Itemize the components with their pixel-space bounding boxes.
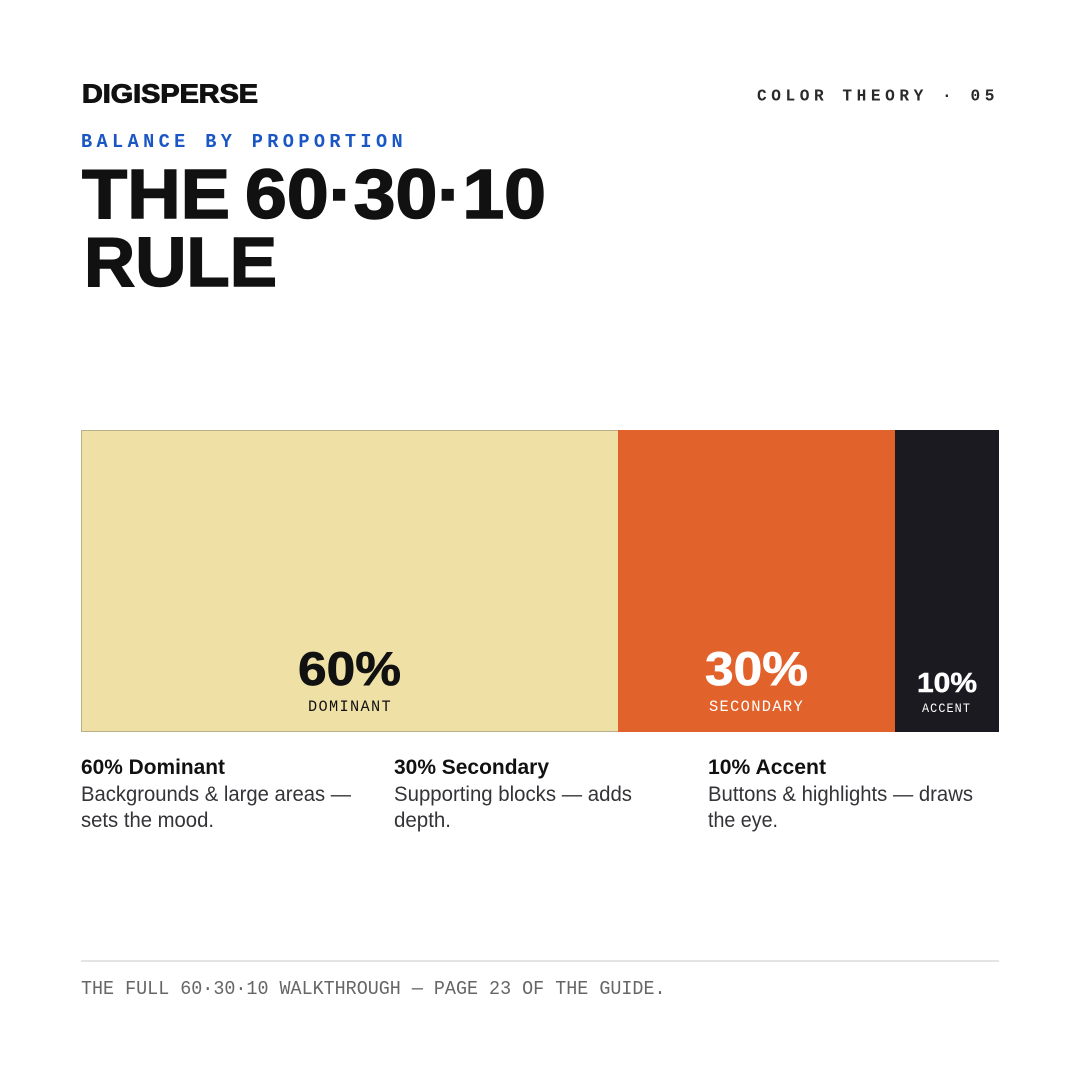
title: THE xyxy=(82,155,230,233)
segment: 30% secondary: 30% xyxy=(705,642,808,695)
series label: COLOR THEORY · 05 xyxy=(757,88,999,106)
segment: 10% accent: ACCENT xyxy=(922,701,971,716)
brand wordmark: DIGISPERSE xyxy=(82,80,258,108)
segment: 60% dominant: DOMINANT xyxy=(308,698,392,716)
title: RULE xyxy=(84,223,277,301)
footer note: THE FULL 60·30·10 WALKTHROUGH — PAGE 23 OF THE GUIDE. xyxy=(81,978,666,1000)
segment: 60% dominant: 60% xyxy=(298,642,401,695)
segment: 60% dominant xyxy=(82,430,618,732)
title: 60·30·10 xyxy=(245,155,546,233)
eyebrow: BALANCE BY PROPORTION xyxy=(81,131,407,153)
title xyxy=(82,155,546,301)
legend: 10% accent: the eye. xyxy=(708,809,778,832)
proportion bar chart xyxy=(82,430,999,732)
legend: 30% secondary xyxy=(394,756,632,832)
legend: 30% secondary: Supporting blocks — adds xyxy=(394,783,632,806)
legend: 10% accent: Buttons & highlights — draws xyxy=(708,783,973,806)
segment: 10% accent: 10% xyxy=(917,667,977,698)
legend: 60% dominant: 60% Dominant xyxy=(81,756,225,779)
segment: 30% secondary: SECONDARY xyxy=(709,698,804,716)
legend: 30% secondary: depth. xyxy=(394,809,451,832)
legend: 30% secondary: 30% Secondary xyxy=(394,756,549,779)
segment: 10% accent xyxy=(895,430,999,732)
legend: 60% dominant: Backgrounds & large areas — xyxy=(81,783,351,806)
header xyxy=(82,80,999,108)
segment: 30% secondary xyxy=(618,430,895,732)
legend: 60% dominant xyxy=(81,756,351,832)
legend: 10% accent: 10% Accent xyxy=(708,756,826,779)
legend: 10% accent xyxy=(708,756,973,832)
legend: 60% dominant: sets the mood. xyxy=(81,809,214,832)
